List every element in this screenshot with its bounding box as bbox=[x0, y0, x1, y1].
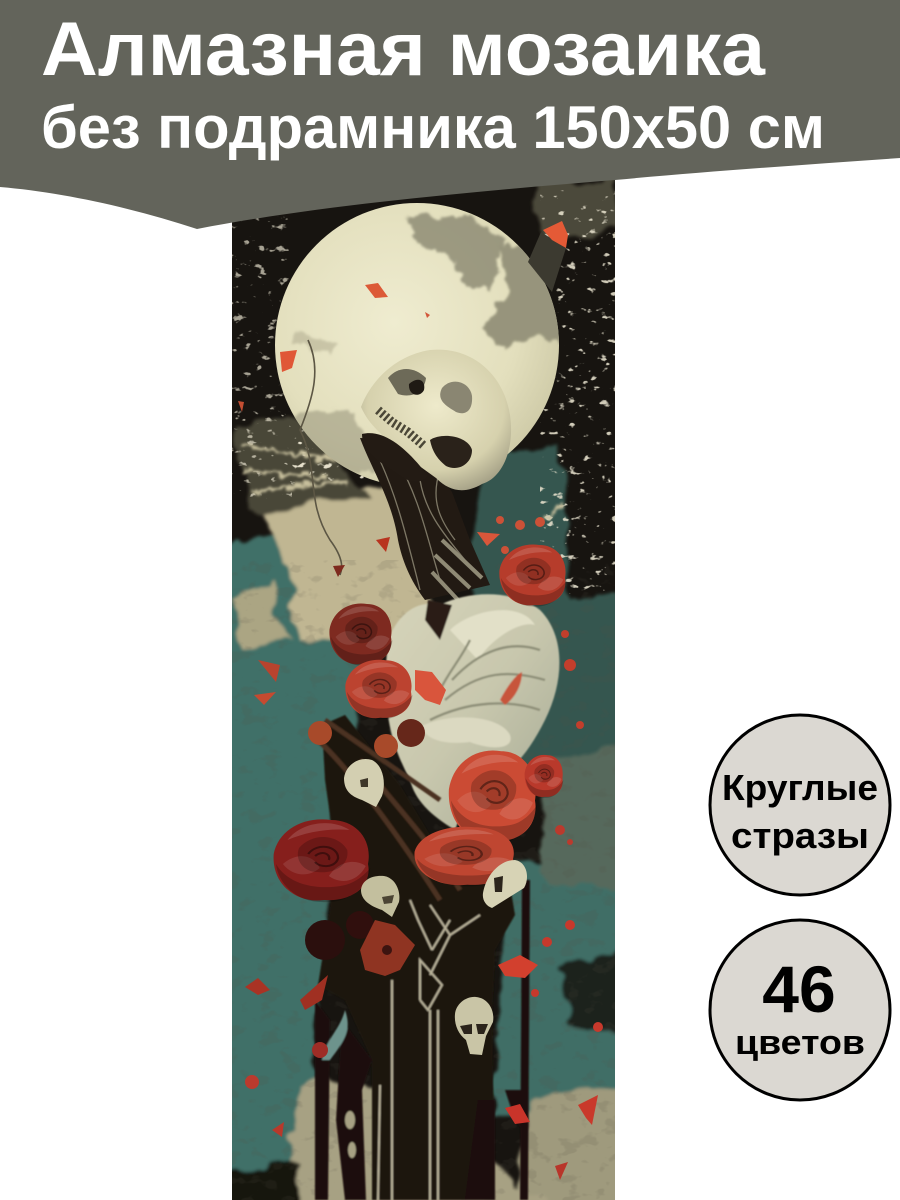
small skull: left lower bbox=[361, 876, 399, 917]
beige splatter in dark areas bbox=[232, 190, 615, 595]
small skull: right bbox=[483, 860, 527, 908]
rose: lower centre bbox=[414, 827, 515, 886]
rose: small right bbox=[525, 755, 563, 798]
neck and vessels bbox=[360, 438, 490, 600]
subtitle: без подрамника 150х50 см bbox=[41, 94, 825, 161]
dark stalk behind moon bbox=[528, 232, 566, 292]
rose: dark left bbox=[274, 819, 370, 902]
blossoms and berries bbox=[238, 221, 603, 1180]
title: Алмазная мозаика bbox=[41, 7, 766, 92]
small skull: upper bbox=[344, 759, 384, 807]
rose: neck bbox=[499, 544, 567, 607]
vine on left of moon bbox=[300, 340, 342, 575]
badge: 46 colours: 46 bbox=[762, 952, 836, 1026]
badge: round rhinestones: Круглые bbox=[722, 767, 878, 808]
rose: red middle bbox=[345, 660, 413, 719]
dark body with roots bbox=[315, 715, 530, 1200]
title bbox=[41, 7, 825, 161]
painting background bbox=[232, 180, 615, 1200]
header banner bbox=[0, 0, 900, 229]
rose: upper left dark bbox=[329, 603, 392, 666]
badge: round rhinestones: стразы bbox=[731, 815, 869, 856]
rose: large right bbox=[449, 750, 537, 843]
moon bbox=[275, 203, 570, 487]
painting: skeleton with roses bbox=[232, 180, 615, 1200]
badge: round rhinestones bbox=[710, 715, 890, 895]
shirt bbox=[386, 594, 559, 830]
badge: 46 colours bbox=[710, 920, 890, 1100]
badge: 46 colours: цветов bbox=[735, 1024, 865, 1062]
small skull: bottom bbox=[455, 997, 493, 1055]
skull: main bbox=[361, 350, 511, 490]
